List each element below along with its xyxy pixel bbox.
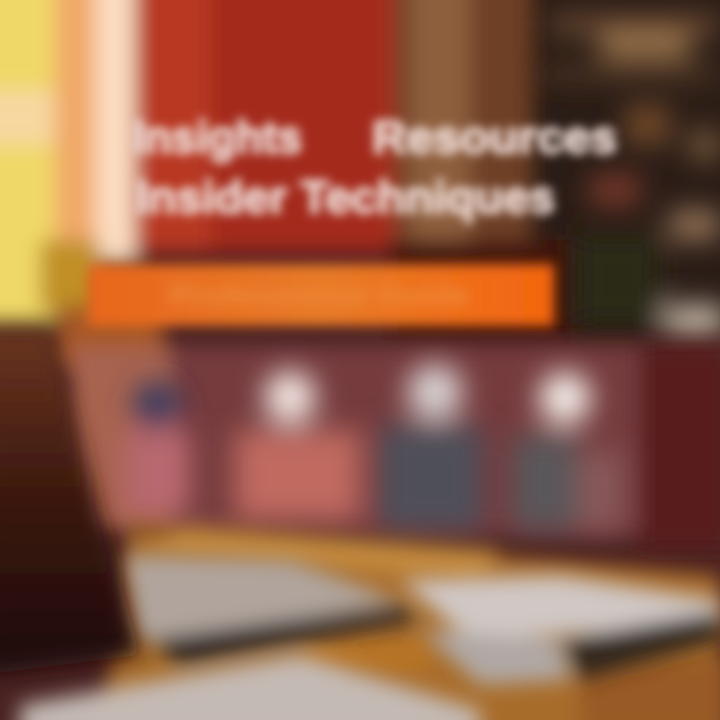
orange banner (88, 264, 554, 326)
heading line 1: Insights (132, 111, 302, 163)
heading line 1 right: Resources (372, 111, 617, 163)
heading (132, 111, 617, 223)
laptop (0, 330, 140, 675)
heading line 2: Insider Techniques (135, 171, 555, 223)
bookshelf (540, 15, 720, 335)
banner text: Professional Guide (170, 280, 470, 310)
figure 3 (378, 364, 483, 530)
presenters row (125, 364, 623, 530)
papers on desk (20, 555, 720, 720)
figure 1 (125, 381, 190, 515)
lower wall band (70, 345, 720, 550)
figure 2 (235, 371, 360, 520)
desk (100, 525, 720, 720)
figure 4 (512, 372, 623, 530)
